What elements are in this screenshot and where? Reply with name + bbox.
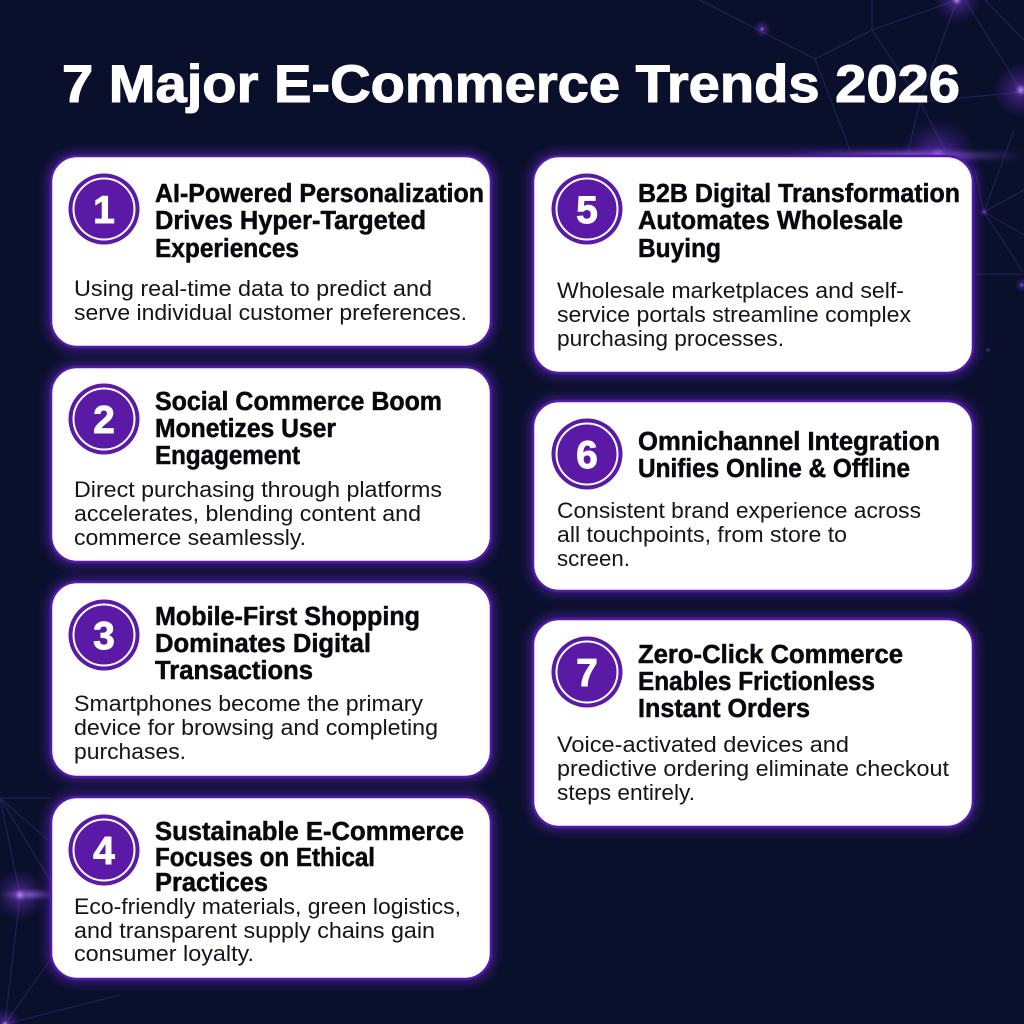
heading: trend 7 bbox=[638, 641, 903, 723]
heading: trend 3: Dominates Digital bbox=[155, 630, 371, 658]
icon: number 2: 2 bbox=[93, 399, 115, 442]
icon: number 3 bbox=[68, 600, 140, 670]
text: trend 2 description: accelerates, blending content and bbox=[74, 501, 421, 526]
heading: trend 1: AI-Powered Personalization bbox=[155, 180, 484, 208]
text: trend 3 description: purchases. bbox=[74, 739, 186, 764]
icon: number 4 bbox=[68, 814, 140, 886]
icon: number 6: 6 bbox=[576, 434, 598, 477]
text: trend 3 description bbox=[74, 691, 438, 764]
text: trend 3 description: Smartphones become the primary bbox=[74, 691, 424, 716]
heading: trend 2: Monetizes User bbox=[155, 415, 336, 443]
text: trend 7 description: predictive ordering eliminate checkout bbox=[557, 756, 950, 781]
heading: trend 5: B2B Digital Transformation bbox=[638, 180, 960, 208]
heading: trend 2: Social Commerce Boom bbox=[155, 388, 442, 416]
heading: trend 7: Zero-Click Commerce bbox=[638, 641, 903, 669]
icon: number 4: 4 bbox=[93, 830, 115, 873]
text: trend 4 description: consumer loyalty. bbox=[74, 941, 254, 966]
heading: trend 3: Mobile-First Shopping bbox=[155, 603, 420, 631]
icon: number 5: 5 bbox=[576, 189, 598, 232]
heading: trend 4 bbox=[155, 818, 464, 897]
text: trend 4 description: and transparent supply chains gain bbox=[74, 918, 435, 943]
text: trend 6 description bbox=[557, 498, 921, 571]
text: trend 6 description: Consistent brand experience across bbox=[557, 498, 921, 523]
icon: number 2 bbox=[68, 384, 140, 454]
text: trend 4 description: Eco-friendly materials, green logistics, bbox=[74, 894, 461, 919]
icon: number 7: 7 bbox=[576, 652, 598, 695]
icon: number 3: 3 bbox=[93, 615, 115, 658]
heading: trend 6: Unifies Online & Offline bbox=[638, 455, 910, 483]
heading: trend 6: Omnichannel Integration bbox=[638, 428, 940, 456]
panel: trend 5 bbox=[533, 156, 973, 373]
text: trend 5 description bbox=[557, 278, 912, 351]
text: trend 7 description: Voice-activated devices and bbox=[557, 732, 849, 757]
panel: trend 6 bbox=[533, 401, 973, 591]
heading: trend 1 bbox=[155, 180, 484, 263]
text: trend 1 description: serve individual customer preferences. bbox=[74, 300, 467, 325]
heading: trend 5 bbox=[638, 180, 960, 263]
icon: number 6 bbox=[552, 418, 622, 490]
text: trend 6 description: all touchpoints, from store to bbox=[557, 522, 847, 547]
text: trend 2 description bbox=[74, 477, 442, 550]
panel: trend 3 bbox=[51, 582, 491, 777]
heading: trend 4: Sustainable E-Commerce bbox=[155, 818, 464, 846]
heading: trend 5: Buying bbox=[638, 235, 721, 263]
text: trend 7 description bbox=[557, 732, 950, 805]
text: trend 5 description: purchasing processes. bbox=[557, 326, 784, 351]
icon: number 1 bbox=[68, 174, 140, 244]
heading: trend 1: Experiences bbox=[155, 235, 299, 263]
card glow bbox=[48, 153, 976, 982]
heading: trend 4: Focuses on Ethical bbox=[155, 844, 375, 872]
text: trend 7 description: steps entirely. bbox=[557, 780, 695, 805]
heading: trend 4: Practices bbox=[155, 869, 268, 897]
heading: trend 7: Instant Orders bbox=[638, 695, 810, 723]
text: trend 3 description: device for browsing and completing bbox=[74, 715, 438, 740]
icon: number 7 bbox=[552, 636, 622, 708]
heading: trend 2: Engagement bbox=[155, 442, 300, 470]
panel: trend 2 bbox=[51, 367, 491, 562]
heading: trend 6 bbox=[638, 428, 940, 483]
heading: trend 2 bbox=[155, 388, 442, 470]
panel: trend 4 bbox=[51, 797, 491, 979]
title: 7 Major E-Commerce Trends 2026 bbox=[62, 55, 960, 114]
text: trend 6 description: screen. bbox=[557, 546, 630, 571]
heading: trend 5: Automates Wholesale bbox=[638, 207, 903, 235]
text: trend 2 description: commerce seamlessly. bbox=[74, 525, 306, 550]
heading: trend 1: Drives Hyper-Targeted bbox=[155, 207, 426, 235]
icon: number 1: 1 bbox=[93, 189, 115, 232]
text: trend 4 description bbox=[74, 894, 461, 966]
panel: trend 1 bbox=[51, 156, 491, 347]
heading: trend 7: Enables Frictionless bbox=[638, 668, 875, 696]
heading: trend 3 bbox=[155, 603, 420, 685]
heading: trend 3: Transactions bbox=[155, 657, 313, 685]
text: trend 1 description: Using real-time data to predict and bbox=[74, 276, 432, 301]
icon: number 5 bbox=[552, 174, 622, 244]
text: trend 5 description: service portals streamline complex bbox=[557, 302, 912, 327]
text: trend 2 description: Direct purchasing through platforms bbox=[74, 477, 442, 502]
text: trend 5 description: Wholesale marketplaces and self- bbox=[557, 278, 904, 303]
panel: trend 7 bbox=[533, 619, 973, 827]
text: trend 1 description bbox=[74, 276, 467, 325]
